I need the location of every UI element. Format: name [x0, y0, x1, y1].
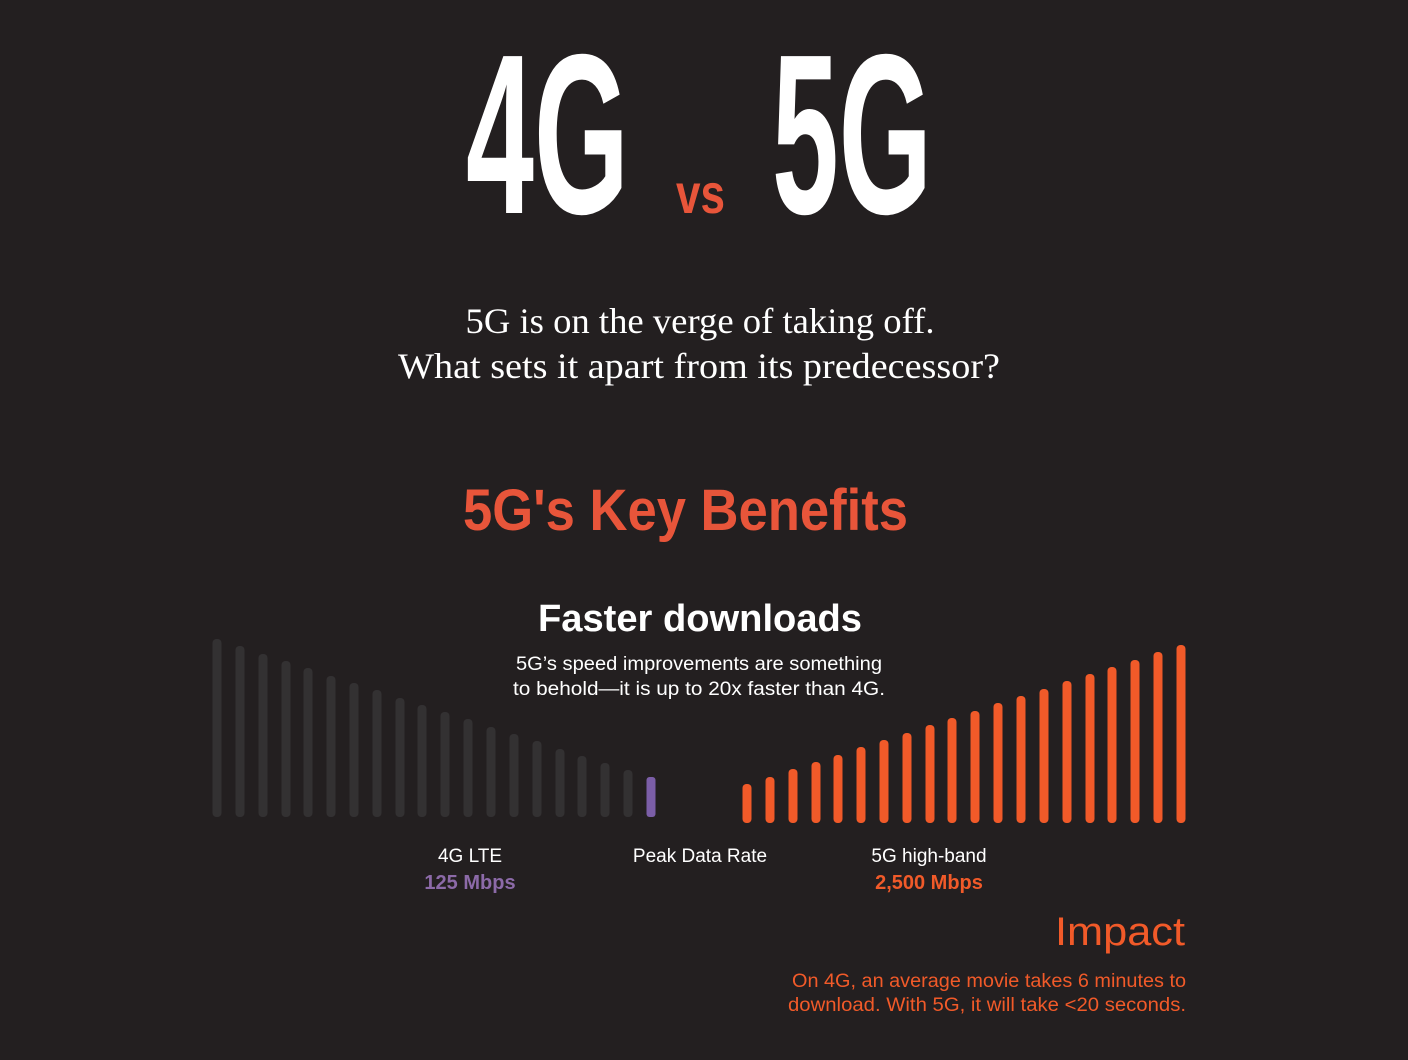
text: impact description: On 4G, an average movie takes 6 minutes to	[792, 971, 1186, 992]
text: impact description: download. With 5G, it will take <20 seconds.	[788, 995, 1186, 1016]
title: 4G vs 5G: 4G	[466, 8, 629, 262]
label: 4G LTE: 4G LTE	[438, 846, 502, 867]
text: impact description	[788, 971, 1186, 1016]
heading: 5G's Key Benefits: 5G's Key Benefits	[463, 478, 908, 543]
label: Peak Data Rate: Peak Data Rate	[633, 846, 767, 867]
title: 4G vs 5G: vs	[676, 162, 725, 225]
heading: Faster downloads: Faster downloads	[538, 598, 862, 640]
label: 4G LTE	[424, 846, 516, 894]
label: 5G high-band: 2,500 Mbps	[875, 872, 983, 894]
title: 4G vs 5G	[466, 8, 932, 262]
chart: 5G bars	[742, 645, 1186, 823]
text: description: to behold—it is up to 20x faster than 4G.	[513, 679, 885, 700]
text: description: 5G’s speed improvements are something	[516, 654, 882, 675]
text: description	[513, 654, 885, 700]
heading: Impact: Impact	[1055, 910, 1185, 954]
subtitle	[398, 301, 1000, 386]
label: 4G LTE: 125 Mbps	[424, 872, 516, 894]
chart: 4G bars	[212, 639, 656, 817]
subtitle: What sets it apart from its predecessor?	[398, 346, 1000, 386]
subtitle: 5G is on the verge of taking off.	[466, 301, 934, 341]
label: 5G high-band	[871, 846, 987, 894]
title: 4G vs 5G: 5G	[772, 8, 932, 262]
label: 5G high-band: 5G high-band	[871, 846, 987, 867]
